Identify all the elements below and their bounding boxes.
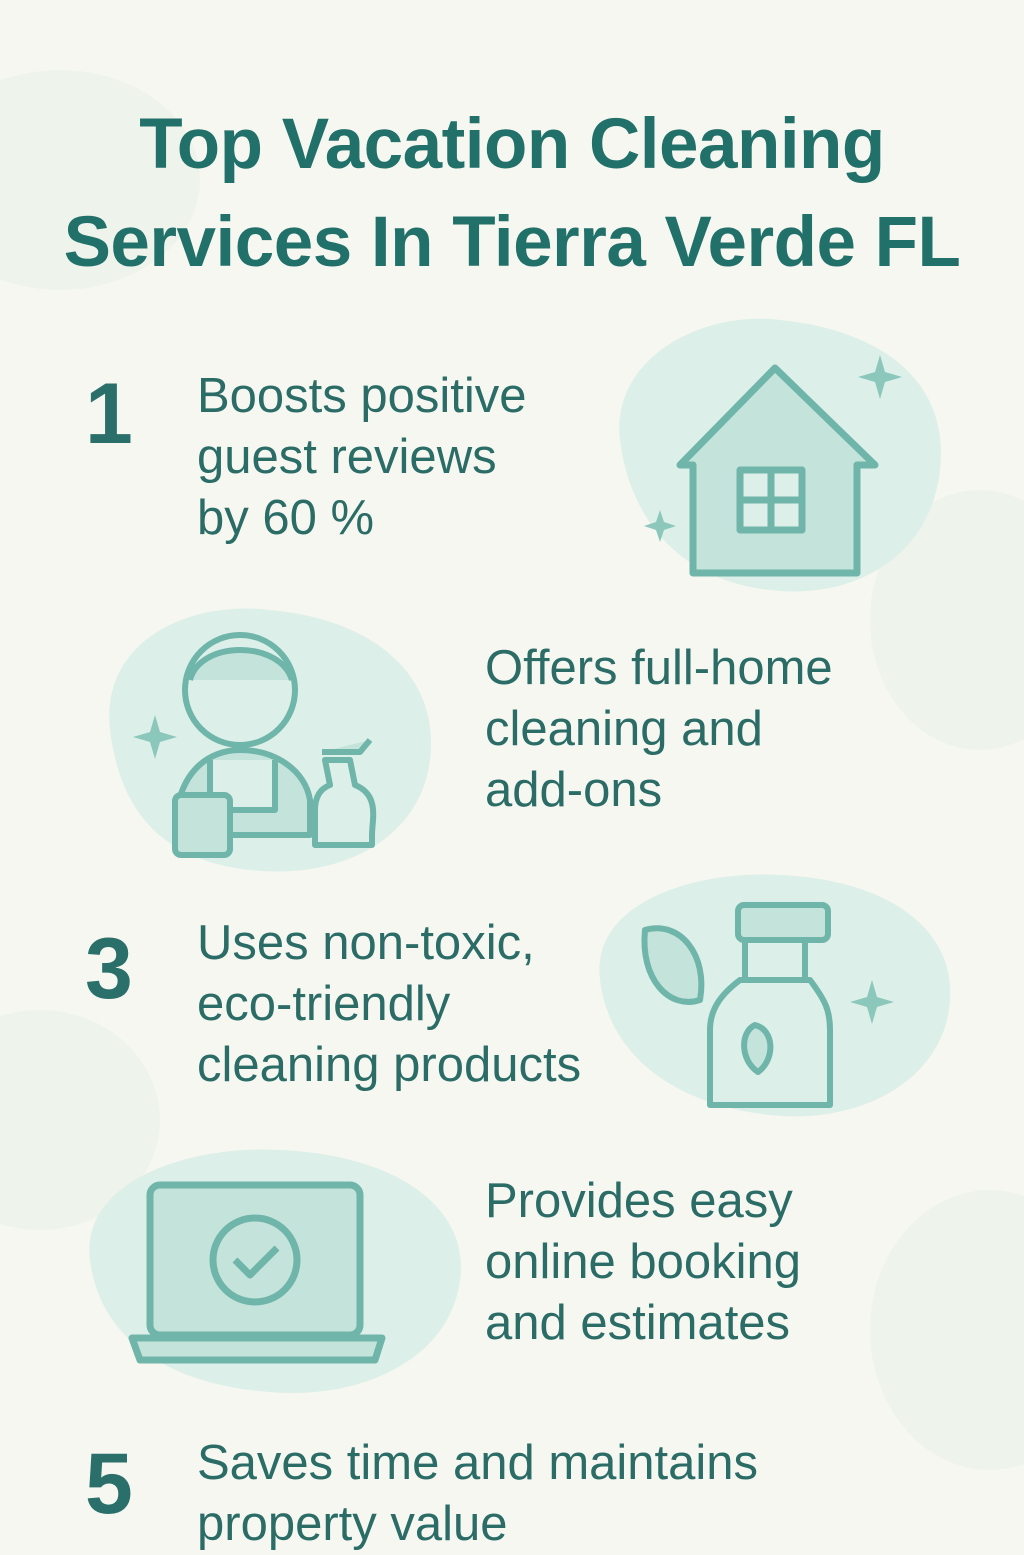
icon: eco spray bottle <box>600 874 950 1116</box>
item 2 text: cleaning and <box>485 702 763 756</box>
item 4 text: and estimates <box>485 1296 790 1350</box>
item 5 <box>85 1436 758 1551</box>
item 1 <box>85 366 527 545</box>
title: Top Vacation Cleaning <box>139 105 885 184</box>
item 4 text: Provides easy <box>485 1174 793 1228</box>
item 2 text: add-ons <box>485 763 662 817</box>
number 5: 5 <box>85 1436 133 1532</box>
item 2 text: Offers full-home <box>485 641 833 695</box>
text 1 <box>197 369 527 545</box>
number 3: 3 <box>85 921 133 1017</box>
icon: house <box>619 318 941 592</box>
text 3: Uses non-toxic, <box>197 916 535 970</box>
item 4 text <box>485 1174 801 1350</box>
title <box>64 105 960 282</box>
text 5: property value <box>197 1497 508 1551</box>
icon: cleaner person <box>109 608 431 872</box>
text 3: cleaning products <box>197 1038 581 1092</box>
icon: laptop with check <box>90 1150 461 1393</box>
text 5 <box>197 1436 758 1551</box>
item 2 text <box>485 641 833 817</box>
item 3 <box>85 916 581 1092</box>
number 1: 1 <box>85 366 133 462</box>
text 5: Saves time and maintains <box>197 1436 758 1490</box>
text 1: by 60 % <box>197 491 374 545</box>
text 1: guest reviews <box>197 430 497 484</box>
item 4 text: online booking <box>485 1235 801 1289</box>
title: Services In Tierra Verde FL <box>64 203 960 282</box>
text 1: Boosts positive <box>197 369 527 423</box>
text 3 <box>197 916 581 1092</box>
text 3: eco-triendly <box>197 977 450 1031</box>
